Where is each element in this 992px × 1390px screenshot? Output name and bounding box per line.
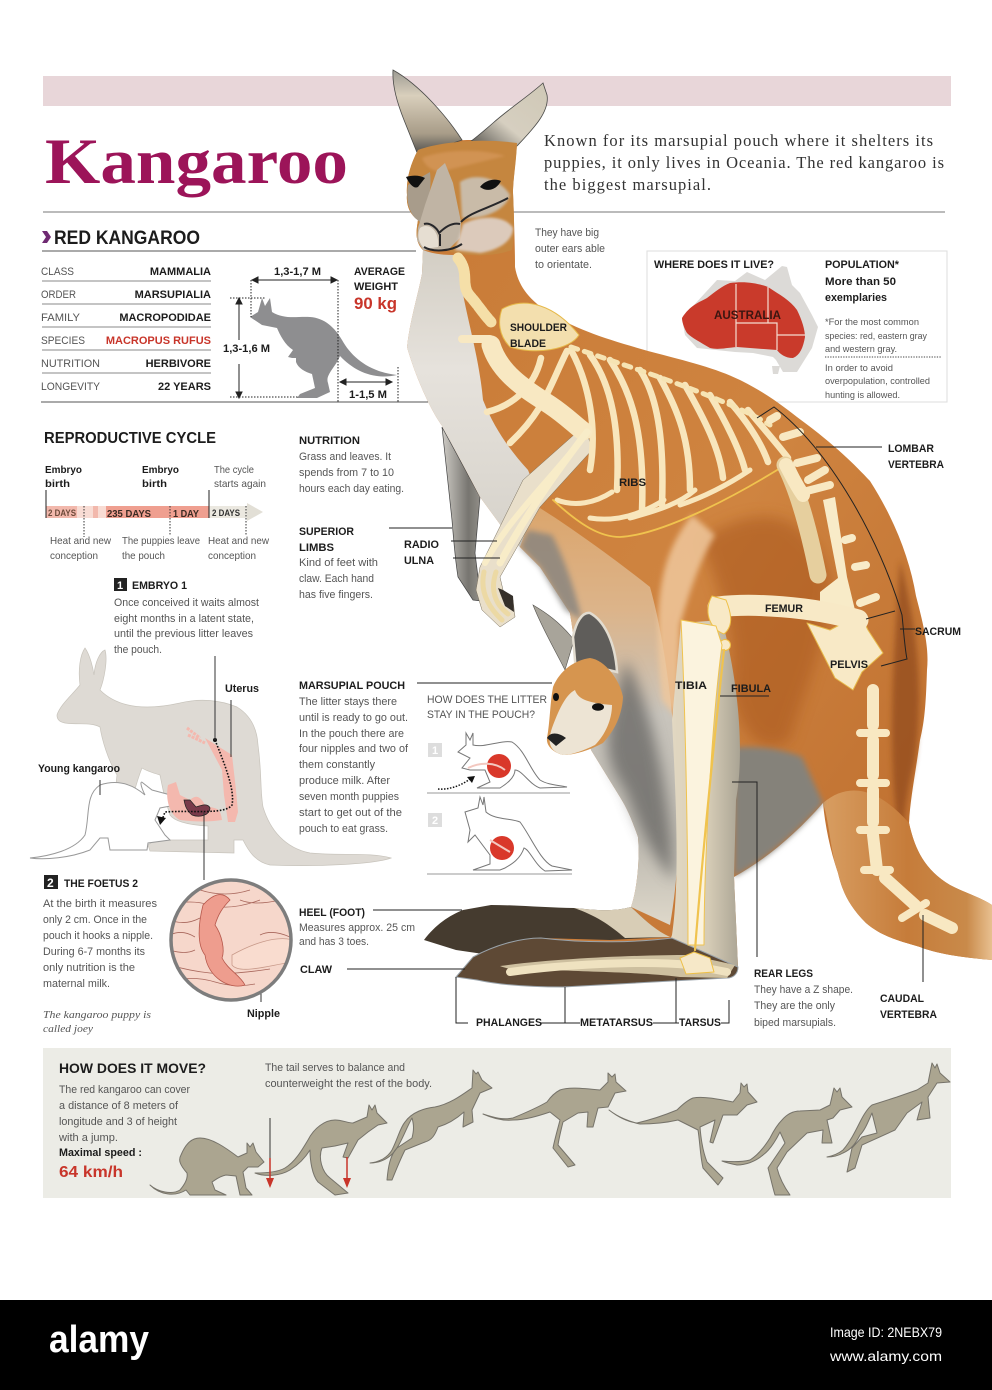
text block: the foetus 2: During 6-7 months its [43, 946, 145, 958]
image id: Image ID: 2NEBX79 [830, 1324, 942, 1340]
label: claw: CLAW [300, 964, 333, 976]
move heading: HOW DOES IT MOVE? [59, 1060, 206, 1076]
near foot [456, 938, 738, 987]
anatomy labels: TARSUS [679, 1017, 721, 1029]
grey fur below arm [520, 530, 582, 620]
labels: Nipple [247, 1008, 280, 1020]
panel: how does it move [43, 1048, 951, 1198]
text block: marsupial pouch: MARSUPIAL POUCH [299, 680, 405, 692]
note: ears: to orientate. [535, 259, 592, 271]
eyes [406, 176, 501, 190]
note: ears: outer ears able [535, 243, 605, 255]
upper arm bone [491, 345, 583, 431]
text block: heel: Measures approx. 25 cm [299, 922, 415, 934]
joey ears [533, 605, 617, 672]
sacrum [820, 497, 855, 610]
text block: marsupial pouch: them constantly [299, 759, 375, 771]
image id: www.alamy.com [829, 1348, 942, 1364]
right cheek [455, 218, 513, 253]
anatomy labels: BLADE [510, 338, 546, 350]
intro text: the biggest marsupial. [544, 175, 711, 194]
snout tip [418, 226, 438, 249]
cycle top labels: birth [142, 478, 167, 490]
move text: longitude and 3 of height [59, 1116, 177, 1128]
pelvis [807, 614, 883, 690]
text block: embryo 1: eight months in a latent state, [114, 613, 254, 625]
facts table: 22 YEARS [158, 381, 211, 393]
nose and mouth [424, 198, 508, 250]
population text: In order to avoid [825, 363, 893, 374]
anatomy labels: FIBULA [731, 683, 771, 695]
panel: reproductive cycle timeline [44, 430, 269, 562]
rib cartilage [557, 470, 750, 519]
timeline bar: 2 DAYS [212, 508, 240, 519]
adult silhouette [57, 648, 391, 866]
population text [825, 259, 941, 401]
fibula [695, 650, 724, 950]
text block: marsupial pouch [299, 680, 409, 835]
panel: where does it live map [654, 259, 941, 401]
timeline bar: 1 DAY [173, 508, 199, 520]
timeline captions: conception [50, 550, 98, 562]
anatomy labels: VERTEBRA [880, 1009, 937, 1021]
leader lines [100, 656, 261, 1002]
move text: 64 km/h [59, 1164, 123, 1181]
hand claws [498, 588, 514, 612]
header band [43, 76, 951, 106]
note: ears [535, 227, 605, 271]
state borders [736, 284, 805, 350]
text block: embryo 1: Once conceived it waits almost [114, 597, 259, 609]
timeline captions [50, 535, 269, 562]
cycle top labels: birth [45, 478, 70, 490]
foetus [184, 800, 210, 816]
timeline bar [46, 490, 263, 537]
cycle top labels: starts again [214, 478, 266, 490]
force arrows [266, 1118, 351, 1188]
dimension labels [223, 266, 387, 401]
text block: superior limbs: has five fingers. [299, 589, 373, 601]
text block: superior limbs: LIMBS [299, 542, 334, 554]
joey nose [547, 734, 566, 746]
collar bone [462, 335, 490, 343]
text block: nutrition: spends from 7 to 10 [299, 467, 394, 479]
joey face pale [550, 690, 612, 755]
text block: embryo 1: the pouch. [114, 644, 162, 656]
cycle top labels [45, 464, 266, 490]
tail note: counterweight the rest of the body. [265, 1078, 432, 1090]
step 1 kangaroo: 1 [432, 745, 438, 757]
alamy logo: alamy [49, 1319, 149, 1361]
footer band [0, 1300, 992, 1390]
joey head [547, 658, 623, 755]
text block: marsupial pouch: The litter stays there [299, 696, 397, 708]
labels: Uterus [225, 683, 259, 695]
average weight: WEIGHT [354, 281, 398, 293]
far foot [424, 905, 668, 955]
tail [823, 791, 992, 960]
timeline captions: the pouch [122, 550, 165, 562]
text block: marsupial pouch: pouch to eat grass. [299, 823, 388, 835]
magnifier: foetus on nipple [170, 880, 293, 1000]
panel question: STAY IN THE POUCH? [427, 709, 535, 721]
timeline bar: 235 DAYS [107, 508, 151, 520]
text block: the foetus 2: only 2 cm. Once in the [43, 914, 147, 926]
text block: marsupial pouch: seven month puppies [299, 791, 399, 803]
move text: The red kangaroo can cover [59, 1084, 190, 1096]
spine dorsal processes [571, 347, 770, 425]
text block: heel: HEEL (FOOT) [299, 907, 365, 919]
text block: marsupial pouch: start to get out of the [299, 807, 402, 819]
anatomy labels: FEMUR [765, 603, 803, 615]
tibia [681, 620, 722, 945]
text block: marsupial pouch: produce milk. After [299, 775, 390, 787]
panel question [427, 694, 547, 721]
dimension arrows [230, 277, 398, 402]
body silhouette [407, 140, 992, 987]
population text: More than 50 [825, 276, 896, 288]
anatomy labels: LOMBAR [888, 443, 934, 455]
note: ears: They have big [535, 227, 599, 239]
belly fur [520, 505, 679, 925]
sacrum processes [845, 538, 876, 603]
young kangaroo outline [30, 782, 178, 859]
panel: red kangaroo facts [41, 228, 428, 402]
timeline captions: conception [208, 550, 256, 562]
facts table: NUTRITION [41, 358, 100, 370]
step 1 kangaroo [427, 733, 570, 793]
note: joey: The kangaroo puppy is [43, 1009, 151, 1021]
text block: rear legs: biped marsupials. [754, 1017, 836, 1029]
text block: nutrition: NUTRITION [299, 435, 360, 447]
ribs [487, 350, 788, 510]
dark abdomen shading [700, 517, 830, 746]
chest fur [407, 250, 540, 547]
timeline captions: Heat and new [50, 535, 111, 547]
timeline bar: 2 DAYS [48, 508, 76, 519]
note: joey [43, 1009, 151, 1035]
near arm [476, 425, 592, 627]
anatomy labels: RIBS [619, 477, 646, 489]
cycle heading: REPRODUCTIVE CYCLE [44, 430, 216, 447]
facts table: MARSUPIALIA [135, 289, 211, 301]
text block: nutrition: hours each day eating. [299, 483, 404, 495]
upper muzzle [417, 163, 461, 251]
cycle top labels: Embryo [45, 464, 82, 476]
timeline captions: The puppies leave [122, 535, 200, 547]
facts heading: RED KANGAROO [54, 228, 200, 249]
move text: with a jump. [58, 1132, 118, 1144]
anatomy labels [404, 322, 961, 1029]
hand bones [483, 572, 508, 620]
cycle top labels: The cycle [214, 464, 254, 476]
text block: marsupial pouch: until is ready to go out. [299, 712, 408, 724]
forehead shade [422, 151, 505, 172]
facts table: LONGEVITY [41, 381, 101, 393]
text block: the foetus 2: THE FOETUS 2 [64, 878, 138, 890]
labels [38, 683, 280, 1020]
facts table: MACROPUS RUFUS [106, 335, 211, 347]
shoulder blade [500, 303, 579, 351]
text block: the foetus 2: 2 [47, 876, 54, 890]
femur [718, 605, 858, 620]
move text [58, 1084, 190, 1181]
dark rump band [892, 560, 919, 860]
kangaroo jump sequence [150, 1063, 950, 1195]
map panel frame [647, 251, 947, 402]
average weight [354, 266, 405, 313]
joey eyes [553, 693, 604, 711]
illustration: skeleton [458, 258, 952, 974]
note: joey: called joey [43, 1023, 93, 1035]
anatomy labels: VERTEBRA [888, 459, 944, 471]
text block: superior limbs: Kind of feet with [299, 557, 378, 569]
ears [393, 70, 547, 155]
text block: nutrition [299, 435, 404, 495]
cycle top labels: Embryo [142, 464, 179, 476]
timeline captions: Heat and new [208, 535, 269, 547]
average weight: AVERAGE [354, 266, 405, 278]
lower rib cage outline [553, 462, 790, 537]
facts table: ORDER [41, 289, 76, 301]
neck vertebrae [458, 258, 491, 322]
illustration: joey in pouch [533, 605, 623, 755]
anatomy labels: TIBIA [675, 680, 707, 692]
diagram: adult with young kangaroo [30, 648, 391, 1020]
step 2 kangaroo [427, 797, 572, 874]
text block: rear legs: They have a Z shape. [754, 984, 853, 996]
dimension labels: 1,3-1,6 M [223, 343, 270, 355]
pale thigh edge [658, 515, 715, 720]
grey fur behind joey [608, 660, 674, 880]
fibula head [720, 640, 730, 650]
far arm [442, 427, 490, 602]
text block: the foetus 2 [43, 875, 157, 990]
population text: POPULATION* [825, 259, 900, 271]
text block: the foetus 2: maternal milk. [43, 978, 110, 990]
anatomy labels: SHOULDER [510, 322, 567, 334]
grey rear fur [734, 747, 823, 877]
population text: overpopulation, controlled [825, 376, 930, 387]
forearm bones [500, 432, 587, 563]
intro text [544, 131, 944, 194]
panel: how does the litter stay [427, 694, 572, 874]
anatomy labels: SACRUM [915, 626, 961, 638]
anatomy labels: PELVIS [830, 659, 868, 671]
population text: species: red, eastern gray [825, 331, 927, 342]
text block: embryo 1: 1 [117, 580, 123, 592]
move text: Maximal speed : [59, 1147, 142, 1159]
anatomy labels: PHALANGES [476, 1017, 542, 1029]
move text: a distance of 8 meters of [59, 1100, 179, 1112]
text block: marsupial pouch: four nipples and two of [299, 743, 409, 755]
uterus pink shape [167, 728, 238, 822]
left face grey [407, 172, 431, 222]
text block: heel: and has 3 toes. [299, 936, 369, 948]
text block: the foetus 2: At the birth it measures [43, 898, 157, 910]
tail note: The tail serves to balance and [265, 1062, 405, 1074]
text block: superior limbs: claw. Each hand [299, 573, 374, 585]
population text: and western gray. [825, 344, 897, 355]
intro text: puppies, it only lives in Oceania. The red kangaroo is [544, 153, 944, 172]
text block: superior limbs: SUPERIOR [299, 526, 354, 538]
facts table: HERBIVORE [146, 358, 211, 370]
title: Kangaroo [45, 126, 348, 198]
labels: Young kangaroo [38, 763, 120, 775]
intro text: Known for its marsupial pouch where it shelters its [544, 131, 933, 150]
australia grey map [682, 266, 818, 374]
far foot light heel [574, 907, 670, 938]
step 2 kangaroo: 2 [432, 815, 438, 827]
anatomy labels: RADIO [404, 539, 439, 551]
text block: rear legs: They are the only [754, 1000, 835, 1012]
facts table: MAMMALIA [150, 266, 211, 278]
anatomy labels: CAUDAL [880, 993, 924, 1005]
text block: embryo 1: until the previous litter leaves [114, 628, 253, 640]
text block: embryo 1: EMBRYO 1 [132, 580, 187, 592]
text block: nutrition: Grass and leaves. It [299, 451, 391, 463]
tail note [265, 1062, 432, 1090]
lumbar vertebrae [785, 465, 818, 575]
facts table: FAMILY [41, 312, 81, 324]
dotted path arrow [162, 740, 233, 820]
text block: the foetus 2: only nutrition is the [43, 962, 135, 974]
facts table [41, 266, 211, 393]
lower leg [660, 620, 740, 978]
population text: *For the most common [825, 317, 919, 328]
anatomy labels: METATARSUS [580, 1017, 653, 1029]
facts table: SPECIES [41, 335, 85, 347]
dimension labels: 1-1,5 M [349, 389, 387, 401]
head [406, 141, 517, 255]
image id [829, 1324, 942, 1364]
population text: hunting is allowed. [825, 390, 900, 401]
text block: superior limbs [299, 526, 378, 601]
text block: the foetus 2: pouch it hooks a nipple. [43, 930, 153, 942]
facts table: CLASS [41, 266, 74, 278]
anatomy labels: ULNA [404, 555, 434, 567]
tail vertebrae [860, 690, 952, 928]
population text: exemplaries [825, 292, 887, 304]
map heading: WHERE DOES IT LIVE? [654, 259, 774, 271]
australia red range [682, 282, 805, 358]
text block: embryo 1 [114, 578, 259, 656]
leader lines [347, 407, 923, 1023]
under-eye pale patch [460, 177, 510, 218]
dimension labels: 1,3-1,7 M [274, 266, 321, 278]
text block: rear legs: REAR LEGS [754, 968, 813, 980]
lumbar processes [770, 416, 830, 492]
facts table: MACROPODIDAE [119, 312, 211, 324]
illustration: red kangaroo [393, 70, 992, 987]
size silhouette [250, 298, 397, 398]
australia label: AUSTRALIA [714, 308, 781, 322]
tarsus bones [680, 952, 714, 974]
average weight: 90 kg [354, 294, 397, 313]
near foot light band [500, 955, 735, 978]
text block: marsupial pouch: In the pouch there are [299, 728, 404, 740]
foot bones [510, 963, 727, 972]
panel question: HOW DOES THE LITTER [427, 694, 547, 706]
femur knee [708, 596, 731, 634]
chevron icon [42, 231, 51, 243]
text block: heel [299, 907, 415, 948]
text block: rear legs [754, 968, 853, 1029]
